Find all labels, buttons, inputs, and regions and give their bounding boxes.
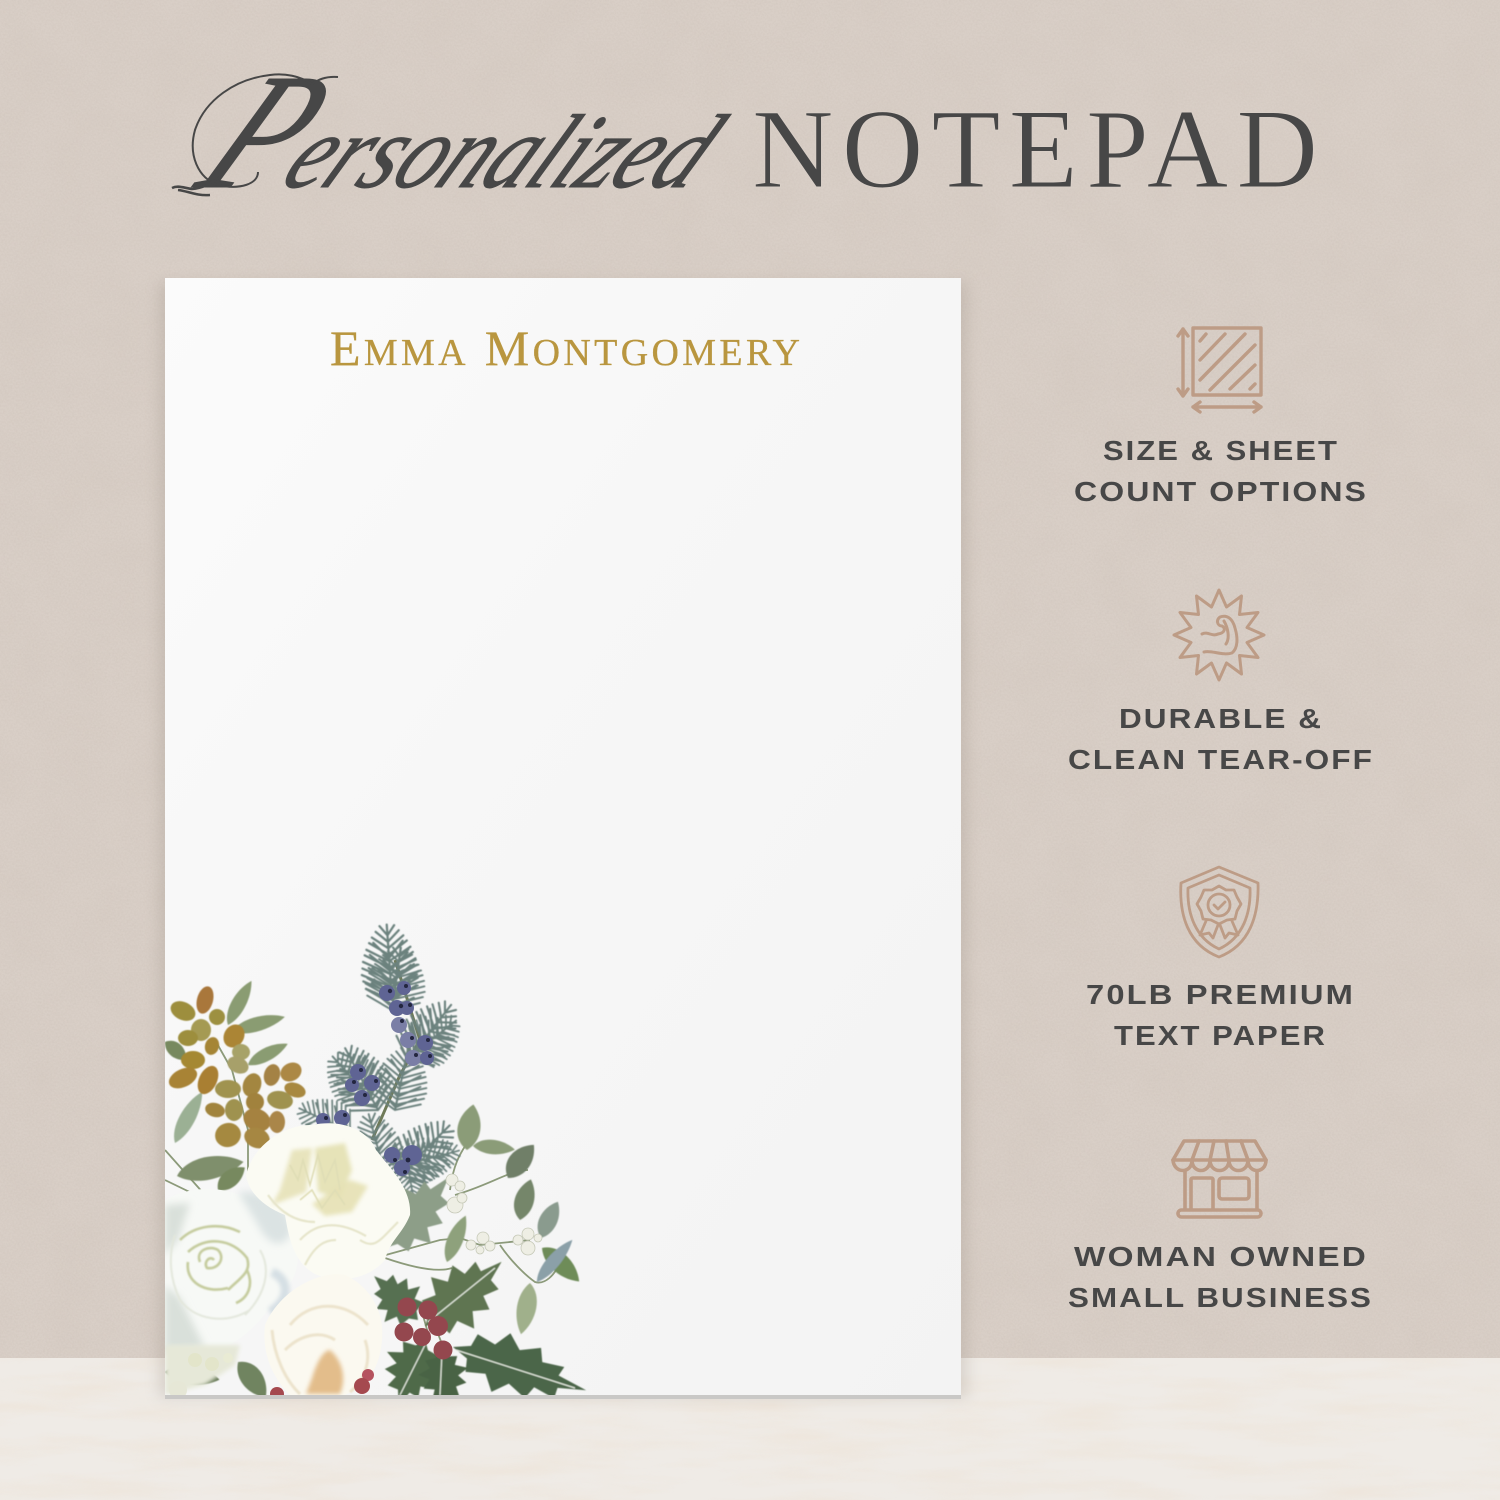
red holly berries [270, 1298, 452, 1401]
icon: size square [1178, 328, 1261, 412]
floral bouquet [161, 923, 596, 1420]
white rose [165, 1189, 298, 1352]
label [1068, 1241, 1373, 1313]
icon: strong arm sunburst [1174, 590, 1264, 680]
pad edge [165, 1392, 961, 1399]
stems [165, 960, 560, 1352]
holly leaves [374, 1178, 586, 1395]
label: WOMAN OWNED [1074, 1241, 1368, 1272]
personalized name: EMMA MONTGOMERY [330, 320, 800, 376]
label: SMALL BUSINESS [1068, 1282, 1373, 1313]
pad sheet [165, 278, 961, 1395]
serif word: NOTEPAD: NOTEPAD [752, 87, 1318, 212]
feature: woman owned [1068, 1141, 1373, 1313]
pad shadow [158, 282, 968, 1398]
pine sprigs [296, 922, 462, 1194]
label: CLEAN TEAR-OFF [1068, 744, 1374, 775]
label: 70LB PREMIUM [1086, 979, 1355, 1010]
mistletoe leaves [439, 1103, 586, 1336]
feature: durable [1068, 590, 1374, 775]
icon: storefront [1173, 1141, 1266, 1217]
feature: premium paper [1086, 867, 1355, 1051]
label [1074, 435, 1368, 507]
gold berries [166, 984, 308, 1152]
title [170, 41, 1318, 223]
notepad [158, 278, 968, 1420]
label: TEXT PAPER [1114, 1020, 1327, 1051]
icon: shield with rosette [1181, 867, 1258, 957]
script word: Personalized: Personalized [170, 41, 774, 223]
green leaves [161, 977, 291, 1403]
feature: size and sheet count [1074, 328, 1368, 507]
blue juniper berries [316, 981, 434, 1176]
lower peony [165, 1292, 378, 1395]
label [1086, 979, 1355, 1051]
label: COUNT OPTIONS [1074, 476, 1368, 507]
marble floor [0, 1358, 1500, 1500]
cream peony [246, 1123, 410, 1279]
label [1068, 703, 1374, 775]
label: DURABLE & [1119, 703, 1323, 734]
white mistletoe berries [446, 1174, 542, 1255]
label: SIZE & SHEET [1103, 435, 1339, 466]
